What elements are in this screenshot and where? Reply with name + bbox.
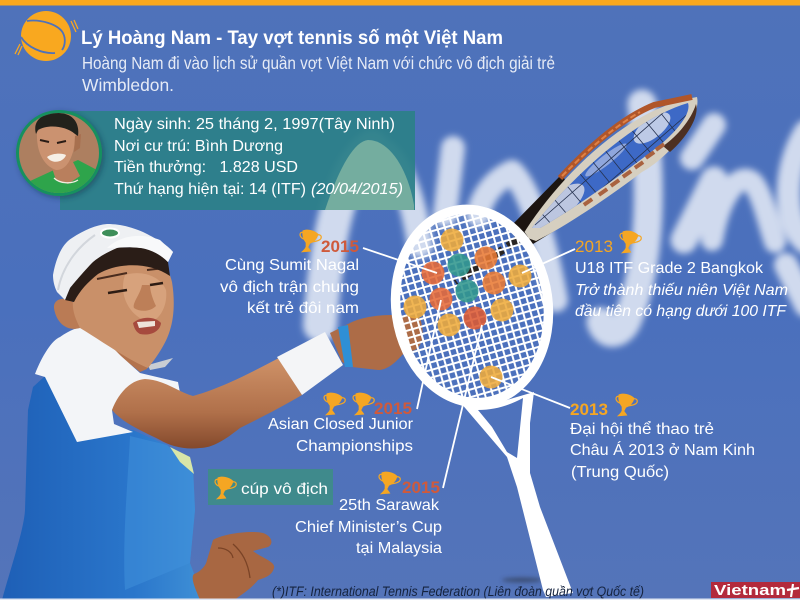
leader lines	[363, 248, 575, 488]
icon: trophy	[215, 477, 236, 499]
callout: 2013 Nam Kinh: Châu Á 2013 ở Nam Kinh	[570, 440, 755, 459]
subtitle: Wimbledon.	[82, 75, 174, 95]
lower hand	[193, 532, 274, 600]
blue bracelet	[338, 325, 353, 367]
icon: trophy	[379, 472, 400, 494]
eyes and brows	[108, 283, 163, 293]
face	[73, 256, 174, 368]
achievement dots	[404, 228, 532, 388]
bottom edge	[0, 598, 800, 600]
info panel background	[60, 111, 415, 210]
callout: 2015 Sarawak: tại Malaysia	[356, 540, 442, 557]
portrait of the player	[16, 110, 102, 196]
mouth	[133, 318, 161, 335]
dark racket shaft glimpsed behind the strings	[455, 234, 526, 282]
wrist and hand	[330, 315, 423, 370]
photo of real racket at top right	[511, 95, 700, 245]
profile facts: Nơi cư trú: Bình Dương	[114, 138, 283, 155]
white cap	[53, 224, 173, 300]
racket strings	[532, 103, 688, 228]
callout: 2015 Sarawak: Chief Minister’s Cup	[295, 519, 442, 536]
hair	[65, 246, 170, 302]
callout: 2015 Sarawak: 2015	[402, 478, 440, 497]
title: Lý Hoàng Nam - Tay vợt tennis số một Việt Nam	[81, 28, 503, 49]
callout: 2013 U18 ITF: 2013	[575, 237, 613, 256]
frame	[383, 199, 561, 413]
callout: 2013 U18 ITF	[575, 231, 788, 320]
icon: trophy	[616, 394, 637, 416]
callout: 2015 Sumit Nagal: Cùng Sumit Nagal	[225, 257, 359, 274]
profile facts: Tiền thưởng: 1.828 USD	[114, 159, 298, 176]
callout: 2013 U18 ITF: đầu tiên có hạng dưới 100 ITF	[575, 303, 787, 320]
callout: 2015 Sumit Nagal: kết trẻ đôi nam	[247, 300, 359, 317]
arc of lettering seen through the panel	[325, 140, 414, 210]
player photo recreation	[2, 224, 423, 600]
handle shadow	[502, 578, 542, 582]
callout: 2015 Asian Closed Junior: 2015	[374, 399, 412, 418]
legend: trophy means champion cup: cúp vô địch	[241, 481, 328, 498]
face highlights	[123, 273, 166, 322]
white shirt shoulder	[35, 327, 181, 442]
callout: 2013 Nam Kinh: (Trung Quốc)	[571, 464, 669, 481]
callout: 2015 Sarawak: 25th Sarawak	[339, 497, 440, 514]
icons: two trophies	[324, 393, 374, 415]
white illustrated racket with strings	[383, 199, 573, 597]
shirt yellow accent	[170, 447, 194, 474]
callout: 2013 U18 ITF: Trở thành thiếu niên Việt Nam	[575, 282, 788, 299]
neck	[83, 300, 165, 372]
icon: trophy	[620, 231, 641, 253]
logo: Vietnam+	[711, 582, 800, 599]
callout: 2013 U18 ITF: U18 ITF Grade 2 Bangkok	[575, 260, 764, 277]
icon: trophy	[300, 230, 321, 252]
subtitle	[82, 53, 555, 95]
grommets on lower rim	[583, 142, 665, 207]
legend: trophy means champion cup	[208, 469, 333, 505]
panel: player profile	[16, 110, 415, 210]
profile facts: Ngày sinh: 25 tháng 2, 1997(Tây Ninh)	[114, 116, 395, 133]
cap brim shade	[107, 236, 173, 262]
blue shirt body	[2, 376, 204, 600]
collar detail	[148, 358, 173, 370]
arm	[112, 358, 302, 449]
racket frame	[522, 97, 697, 241]
lighter shirt panel	[124, 436, 195, 590]
icon: tennis ball logo	[15, 11, 78, 61]
callout: 2015 Asian Closed Junior: Asian Closed Junior	[268, 416, 414, 433]
profile facts: Thứ hạng hiện tại: 14 (ITF)	[114, 181, 306, 198]
callout: 2015 Sarawak	[295, 472, 442, 557]
strings	[383, 199, 561, 411]
callout: 2015 Asian Closed Junior	[268, 393, 414, 455]
callout: 2015 Sumit Nagal: vô địch trận chung	[220, 279, 359, 296]
footnote: (*)ITF: International Tennis Federation (Liên đoàn quần vợt Quốc tế)	[272, 584, 644, 599]
logo: Vietnam+: Vietnam	[714, 582, 786, 599]
throat and handle	[460, 392, 573, 597]
callout: 2013 Nam Kinh: Đại hội thể thao trẻ	[570, 420, 714, 438]
callout: 2015 Asian Closed Junior: Championships	[296, 438, 413, 455]
cap logo	[101, 228, 119, 238]
blurred stadium lettering in the background	[320, 104, 800, 333]
orange upper rim	[560, 97, 692, 178]
racket throat	[511, 174, 582, 244]
profile facts	[114, 116, 403, 198]
subtitle: Hoàng Nam đi vào lịch sử quần vợt Việt Nam với chức vô địch giải trẻ	[82, 53, 555, 73]
nose shadow	[134, 285, 156, 311]
white wristband	[277, 332, 343, 395]
callout: 2015 Sumit Nagal: 2015	[321, 237, 359, 256]
callout: 2015 Sumit Nagal	[220, 230, 359, 317]
callout: 2013 Nam Kinh	[570, 394, 755, 481]
callout: 2013 Nam Kinh: 2013	[570, 400, 608, 419]
dark frame near the tip	[663, 104, 697, 152]
profile facts: (20/04/2015)	[311, 181, 403, 198]
top accent bar	[0, 0, 800, 6]
ear	[54, 299, 80, 329]
